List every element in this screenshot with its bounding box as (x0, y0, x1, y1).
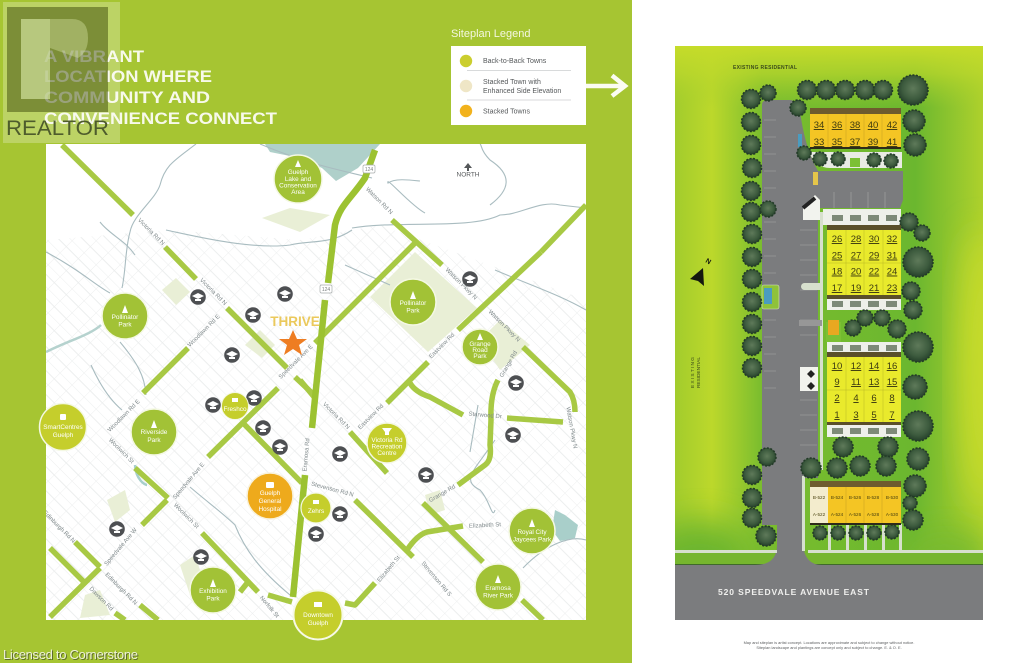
building block: stacked towns A and B: B-526 (849, 495, 862, 500)
legend box (451, 46, 586, 125)
marker: Victoria Rd Recreation Centre: Centre (377, 450, 397, 457)
icon: site north arrow (690, 258, 712, 286)
marker: Exhibition Park: Exhibition (199, 588, 227, 595)
marker: Pollinator Park east: Park (406, 308, 420, 314)
building block: units 17-32: 30 (869, 234, 879, 245)
marker: Guelph Lake and Conservation Area: Lake and (285, 176, 312, 183)
label: existing residential side: RESIDENTIAL (696, 357, 702, 388)
road labels: Dawson Rd (88, 586, 114, 612)
road labels: Woolwich St (172, 503, 200, 530)
road labels: Elizabeth St (469, 522, 501, 530)
highway 124 shields: 124 (322, 287, 330, 293)
building block: units 1-16: 13 (869, 377, 879, 388)
building block: units 17-32: 21 (869, 283, 879, 294)
road labels: Speedvale Ave W (104, 527, 139, 567)
building block: units 17-32: 19 (851, 283, 861, 294)
building block: units 17-32: 28 (851, 234, 861, 245)
legend label: stacked town with enhanced side elevation: Stacked Town with (483, 79, 541, 86)
building block: stacked towns A and B: B-530 (886, 495, 899, 500)
marker: Eramosa River Park: Eramosa (485, 585, 511, 592)
road labels: Norfolk St (258, 595, 280, 620)
marker: Guelph Lake and Conservation Area: Area (291, 189, 305, 196)
marker: SmartCentres Guelph: Guelph (53, 432, 74, 439)
building block: units 33-42: 38 (850, 120, 860, 131)
road labels: Watson Pkwy N (444, 267, 478, 301)
building block: units 33-42: 33 (814, 137, 824, 148)
watermark: REALTOR logo (3, 2, 120, 143)
building block: stacked towns A and B: A-522 (813, 512, 826, 517)
highway 124 shields: 124 (365, 167, 373, 173)
marker: Exhibition Park: Park (206, 596, 220, 602)
building block: units 1-16 (827, 352, 901, 425)
building block: units 1-16: 5 (871, 410, 877, 421)
building block: units 33-42: 36 (832, 120, 842, 131)
title: CONVENIENCE CONNECT (44, 109, 278, 128)
building block: units 1-16: 6 (871, 393, 877, 404)
road labels: Eastview Rd (357, 403, 385, 431)
marker: Royal City Jaycees Park: Jaycees Park (513, 536, 552, 544)
marker: Guelph General Hospital: General (259, 498, 281, 505)
building block: units 1-16: 1 (834, 410, 840, 421)
rivers and creeks (46, 144, 586, 595)
building block: units 17-32: 18 (832, 266, 842, 278)
marker: Zehrs: Zehrs (308, 508, 324, 515)
road labels: Grange Rd (428, 484, 457, 504)
panel: siteplan (675, 46, 983, 620)
panel: green location background (0, 0, 632, 663)
marker: Exhibition Park (190, 567, 236, 613)
legend label: stacked town with enhanced side elevation: Enhanced Side Elevation (483, 88, 561, 95)
building block: units 17-32: 20 (851, 266, 861, 278)
marker: Guelph General Hospital: Guelph (260, 490, 281, 497)
street grid (46, 225, 586, 620)
marker: Freshco: Freshco (223, 406, 247, 413)
road labels: Watson Rd N (364, 187, 393, 216)
building block: units 1-16: 11 (851, 377, 861, 388)
building block: units 1-16: 15 (887, 377, 897, 388)
label: existing residential side (691, 357, 700, 388)
siteplan disclaimer (744, 640, 914, 650)
north indicator: NORTH (456, 172, 480, 178)
legend label: back-to-back towns: Back-to-Back Towns (483, 58, 547, 65)
marker: Pollinator Park west: Park (118, 322, 132, 328)
panel: location map (41, 144, 586, 620)
panel: siteplan legend (451, 28, 586, 125)
building block: units 33-42 (810, 108, 901, 149)
building block: units 17-32: 22 (869, 266, 879, 278)
legend swatch: stacked towns (460, 105, 472, 117)
legend label: stacked town with enhanced side elevation (483, 79, 561, 95)
building block: units 33-42: 35 (832, 137, 842, 148)
marker: Riverside Park: Park (147, 437, 161, 444)
marker: Grange Road Park: Grange (469, 341, 491, 348)
marker: Eramosa River Park (475, 564, 521, 610)
highway 124 shields (320, 165, 375, 293)
building block: units 1-16: 7 (889, 410, 895, 421)
sidewalks (675, 212, 983, 553)
road labels: Victoria Rd N (198, 278, 227, 307)
building block: stacked towns A and B: A-526 (849, 512, 862, 517)
marker: Guelph Lake and Conservation Area: Conservation (279, 182, 317, 190)
arrow: legend to siteplan (586, 76, 625, 96)
marker: Freshco (222, 392, 248, 420)
roads (50, 145, 586, 620)
lake (265, 144, 380, 181)
road labels: Speedvale Ave E (278, 344, 315, 381)
marker: Guelph General Hospital: Hospital (258, 506, 282, 513)
siteplan disclaimer: Map and siteplan is artist concept. Locations are approximate and subject to change without notice. (744, 640, 914, 645)
road labels: Speedvale Ave E (172, 462, 206, 501)
road labels: Edinburgh Rd N (103, 572, 138, 607)
icon: site north arrow: N (704, 258, 712, 266)
building block: units 33-42: 41 (887, 137, 897, 148)
road labels: Edinburgh Rd N (41, 510, 76, 545)
building block: units 1-16: 12 (851, 361, 861, 372)
building block: units 17-32 (827, 225, 901, 299)
building block: units 33-42: 42 (887, 120, 897, 131)
road labels: Eramosa Rd (303, 438, 311, 472)
road labels: Woodlawn Rd E (187, 314, 222, 349)
building block: units 1-16: 9 (834, 377, 840, 388)
parking lot and driveway (675, 100, 983, 620)
school icons (109, 271, 524, 565)
marker: Pollinator Park west (102, 293, 148, 339)
building block: stacked towns A and B: A-528 (867, 512, 880, 517)
lawn island: crosswalk and courtyards (762, 134, 902, 391)
building block: units 33-42: 39 (868, 137, 878, 148)
watermark: licensed to cornerstone: Licensed to Cornerstone (3, 647, 138, 662)
legend swatch: back-to-back towns (460, 55, 472, 67)
parking stall lines (764, 120, 885, 445)
trees (742, 75, 933, 546)
marker: Victoria Rd Recreation Centre: Victoria Rd (371, 437, 403, 444)
marker: Pollinator Park east: Pollinator (400, 300, 427, 307)
road labels: Starwood Dr (468, 412, 502, 420)
marker: Victoria Rd Recreation Centre (367, 423, 407, 463)
legend swatch: stacked town with enhanced side elevation (460, 80, 472, 92)
marker: Riverside Park (131, 409, 177, 455)
building block: stacked towns A and B (810, 481, 901, 525)
marker: Royal City Jaycees Park (509, 508, 555, 554)
building block: stacked towns A and B: B-524 (831, 495, 844, 500)
road labels: Stevenson Rd N (310, 481, 354, 499)
building block: units 1-16: 14 (869, 361, 879, 372)
marker: Victoria Rd Recreation Centre: Recreation (372, 444, 403, 450)
park areas (80, 208, 530, 618)
icon: Thrive location star (279, 330, 307, 355)
road labels: Woodlawn Rd E (107, 399, 142, 434)
building block: stacked towns A and B: B-522 (813, 495, 826, 500)
label: existing residential top: EXISTING RESIDENTIAL (733, 65, 797, 71)
building block: units 17-32: 25 (832, 250, 842, 262)
road labels: Stevenson Rd S (420, 561, 452, 598)
marker: Pollinator Park east (390, 279, 436, 325)
title: LOCATION WHERE (44, 67, 212, 86)
building block: units 17-32: 23 (887, 283, 897, 294)
building block: units 1-16: 3 (853, 410, 859, 421)
marker: Pollinator Park west: Pollinator (112, 314, 139, 321)
marker: Zehrs (301, 493, 331, 523)
THRIVE label: THRIVE (270, 314, 320, 329)
building block: stacked towns A and B: A-530 (886, 512, 899, 517)
marker: Guelph General Hospital (247, 473, 293, 519)
building block: units 1-16: 8 (889, 393, 895, 404)
road labels: Victoria Rd N (321, 402, 350, 431)
building block: units 1-16: 10 (832, 361, 842, 372)
marker: Guelph Lake and Conservation Area: Guelph (288, 169, 309, 176)
road labels: Elizabeth St (377, 555, 402, 584)
legend heading: Siteplan Legend (451, 28, 531, 40)
road labels: Woolwich St (107, 438, 135, 465)
road labels (41, 187, 578, 620)
building block: units 1-16: 2 (834, 393, 840, 404)
road labels: Victoria Rd N (136, 218, 165, 247)
north indicator (457, 163, 479, 176)
building block: units 17-32: 32 (887, 234, 897, 245)
building block: units 33-42: 40 (868, 120, 878, 131)
marker: Riverside Park: Riverside (141, 429, 168, 436)
marker: Downtown Guelph: Guelph (308, 620, 329, 627)
marker: Grange Road Park (462, 329, 498, 365)
building block: units 33-42: 34 (814, 120, 824, 131)
road labels: Eastview Rd (428, 332, 456, 360)
legend label: stacked towns: Stacked Towns (483, 108, 530, 116)
road labels: Watson Pkwy N (487, 309, 521, 343)
building block: units 33-42: 37 (850, 137, 860, 148)
label: existing residential side: EXISTING (690, 357, 696, 388)
marker: Eramosa River Park: River Park (483, 592, 514, 600)
marker: Grange Road Park: Road (472, 347, 488, 354)
building block: units 1-16: 4 (853, 393, 859, 404)
marker: SmartCentres Guelph (40, 404, 86, 450)
marker: Downtown Guelph: Downtown (303, 612, 333, 619)
watermark: licensed to cornerstone: Licensed to Cornerstone (4, 648, 139, 663)
building block: units 17-32: 29 (869, 250, 879, 262)
title (44, 47, 278, 128)
building block: units 17-32: 24 (887, 266, 897, 278)
marker: Royal City Jaycees Park: Royal City (517, 529, 547, 536)
road labels: Grange Rd (499, 350, 519, 379)
siteplan disclaimer: Siteplan landscape and plantings are concept only and subject to change. E. & O. E. (756, 645, 902, 650)
marker: Downtown Guelph (294, 590, 342, 640)
building block: units 17-32: 31 (887, 250, 897, 262)
building block: units 17-32: 17 (832, 283, 842, 294)
title: A VIBRANT (44, 47, 145, 66)
building block: units 17-32: 26 (832, 234, 842, 245)
building block: stacked towns A and B: A-524 (831, 512, 844, 517)
marker: Guelph Lake and Conservation Area (274, 155, 322, 203)
street address: 520 SPEEDVALE AVENUE EAST (718, 587, 870, 597)
marker: SmartCentres Guelph: SmartCentres (43, 424, 83, 431)
lawn (675, 46, 983, 565)
building block: stacked towns A and B: B-528 (867, 495, 880, 500)
title: COMMUNITY AND (44, 88, 210, 107)
watermark: REALTOR logo: REALTOR (6, 117, 109, 140)
marker: Grange Road Park: Park (473, 353, 487, 360)
building block: units 17-32: 27 (851, 250, 861, 262)
road labels: Watson Pkwy N (564, 407, 578, 449)
patios (823, 209, 901, 437)
building block: units 1-16: 16 (887, 361, 897, 372)
